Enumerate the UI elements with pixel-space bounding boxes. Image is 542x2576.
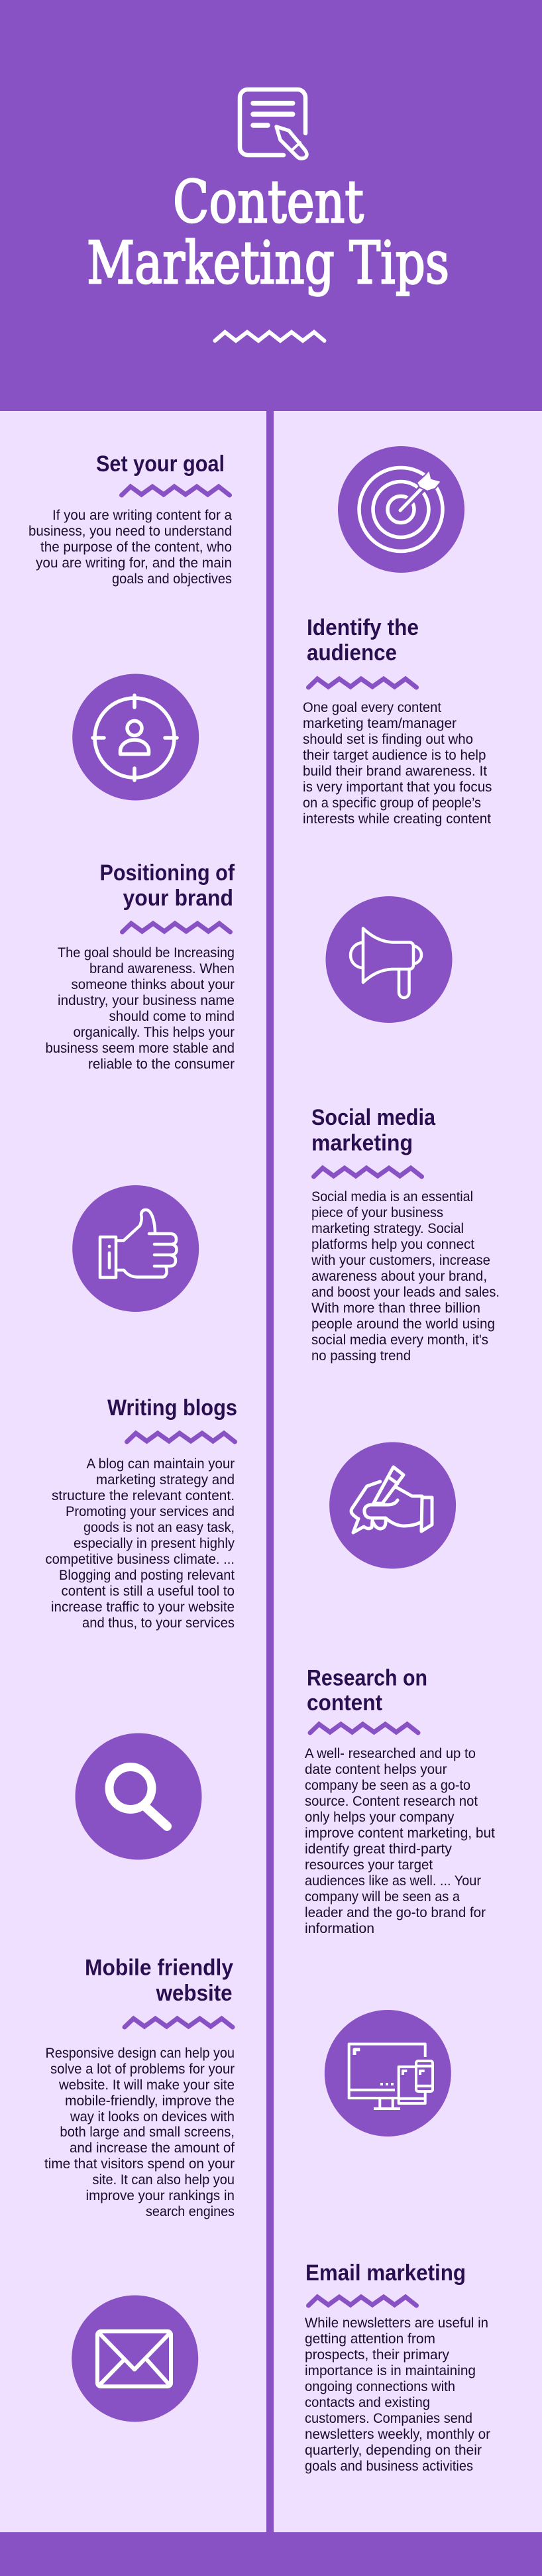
heading xyxy=(311,1105,436,1156)
heading: marketing xyxy=(311,1131,413,1156)
body text xyxy=(305,1745,495,1936)
panel: set your goal xyxy=(28,446,464,587)
zigzag xyxy=(122,923,231,932)
body text: build their brand awareness. It xyxy=(303,763,487,779)
body text: ongoing connections with xyxy=(305,2378,455,2394)
body text: the purpose of the content, who xyxy=(40,539,232,555)
heading: your brand xyxy=(123,886,233,911)
body text: goals and business activities xyxy=(305,2458,473,2474)
heading xyxy=(99,860,235,911)
heading: Identify the xyxy=(307,615,419,640)
body text: on a specific group of people’s xyxy=(303,795,481,811)
body text: quarterly, depending on their xyxy=(305,2442,482,2458)
panel: header banner xyxy=(0,0,542,411)
body text: resources your target xyxy=(305,1857,433,1873)
panel: writing blogs xyxy=(45,1395,456,1631)
body text: no passing trend xyxy=(311,1348,411,1364)
title: Marketing Tips xyxy=(87,229,449,297)
body text: with your customers, increase xyxy=(311,1252,490,1268)
body text: and boost your leads and sales. xyxy=(311,1284,500,1300)
heading: audience xyxy=(307,640,397,666)
body text xyxy=(45,945,235,1072)
body text: structure the relevant content. xyxy=(52,1488,235,1503)
zigzag xyxy=(122,487,229,495)
body text: organically. This helps your xyxy=(73,1024,235,1040)
body text: is very important that you focus xyxy=(303,779,492,795)
body text: A well- researched and up to xyxy=(305,1745,476,1761)
body text: awareness about your brand, xyxy=(311,1268,487,1284)
heading: Set your goal xyxy=(96,451,225,477)
body text: and increase the amount of xyxy=(70,2140,235,2156)
zigzag divider xyxy=(215,332,325,341)
body text: time that visitors spend on your xyxy=(44,2156,235,2172)
icon: target with arrow xyxy=(338,446,464,573)
body text: search engines xyxy=(146,2203,235,2219)
body text: Blogging and posting relevant xyxy=(59,1567,235,1583)
panel: social media marketing xyxy=(72,1105,500,1364)
heading xyxy=(307,615,419,666)
icon: audience crosshair xyxy=(72,673,199,801)
body text: increase traffic to your website xyxy=(51,1599,235,1615)
body text xyxy=(305,2315,490,2474)
body text: customers. Companies send xyxy=(305,2410,472,2426)
body text: goals and objectives xyxy=(112,571,232,587)
body text: newsletters weekly, monthly or xyxy=(305,2426,490,2442)
body text: industry, your business name xyxy=(58,992,235,1008)
icon: thumbs up xyxy=(72,1185,199,1312)
body text: The goal should be Increasing xyxy=(58,945,235,961)
body text: source. Content research not xyxy=(305,1793,478,1809)
body text xyxy=(303,699,492,827)
body text: A blog can maintain your xyxy=(86,1456,235,1472)
body text: While newsletters are useful in xyxy=(305,2315,488,2331)
body text: information xyxy=(305,1920,374,1936)
body text: people around the world using xyxy=(311,1316,495,1332)
body text: If you are writing content for a xyxy=(52,507,232,523)
body text xyxy=(45,1456,235,1631)
body text: interests while creating content xyxy=(303,811,491,827)
title xyxy=(87,168,449,297)
body text: prospects, their primary xyxy=(305,2347,449,2363)
body text: importance is in maintaining xyxy=(305,2363,476,2378)
body text: One goal every content xyxy=(303,699,441,715)
zigzag xyxy=(309,679,416,687)
body text: should set is finding out who xyxy=(303,731,473,747)
icon: envelope xyxy=(72,2295,198,2422)
panel: identify the audience xyxy=(72,615,492,827)
body text xyxy=(28,507,232,587)
body text: brand awareness. When xyxy=(89,961,235,976)
body text: Promoting your services and xyxy=(66,1503,235,1519)
body text: company be seen as a go-to xyxy=(305,1777,470,1793)
body text xyxy=(311,1189,500,1364)
heading: Research on xyxy=(307,1665,427,1690)
body text: site. It can also help you xyxy=(93,2172,235,2188)
body text: mobile-friendly, improve the xyxy=(65,2093,235,2109)
icon: megaphone xyxy=(326,896,452,1023)
body text: marketing team/manager xyxy=(303,715,457,731)
body text: getting attention from xyxy=(305,2331,435,2347)
body text: piece of your business xyxy=(311,1204,443,1220)
body text xyxy=(44,2045,235,2219)
body text: business seem more stable and xyxy=(45,1040,235,1056)
zigzag xyxy=(309,2297,416,2306)
body text: content is still a useful tool to xyxy=(61,1583,235,1599)
heading xyxy=(307,1665,427,1716)
footer bar xyxy=(0,2532,542,2576)
body text: website. It will make your site xyxy=(58,2077,235,2093)
heading: Social media xyxy=(311,1105,436,1130)
body text: especially in present highly xyxy=(74,1535,235,1551)
body text: only helps your company xyxy=(305,1809,455,1825)
heading: Writing blogs xyxy=(107,1395,237,1421)
zigzag xyxy=(314,1168,421,1177)
body text: business, you need to understand xyxy=(28,523,232,539)
body text: you are writing for, and the main xyxy=(36,555,232,571)
body text: marketing strategy. Social xyxy=(311,1220,464,1236)
heading: Email marketing xyxy=(305,2260,466,2286)
heading xyxy=(85,1956,233,2006)
body text: someone thinks about your xyxy=(72,976,235,992)
panel: email marketing xyxy=(72,2260,490,2474)
body text: should come to mind xyxy=(109,1008,235,1024)
body text: company will be seen as a xyxy=(305,1889,460,1904)
body text: competitive business climate. ... xyxy=(45,1551,235,1567)
icon: hand writing with pen xyxy=(329,1442,456,1568)
body text: Social media is an essential xyxy=(311,1189,473,1204)
icon: responsive devices xyxy=(325,2010,451,2137)
body text: improve your rankings in xyxy=(86,2188,235,2203)
body text: marketing strategy and xyxy=(96,1472,235,1488)
body text: Responsive design can help you xyxy=(45,2045,235,2061)
zigzag xyxy=(310,1724,418,1733)
panel: mobile friendly website xyxy=(44,1956,451,2219)
body text: leader and the go-to brand for xyxy=(305,1904,486,1920)
body text: improve content marketing, but xyxy=(305,1825,495,1841)
body text: solve a lot of problems for your xyxy=(50,2061,235,2077)
body text: goods is not an easy task, xyxy=(83,1519,235,1535)
body text: social media every month, it's xyxy=(311,1332,488,1348)
body text: their target audience is to help xyxy=(303,747,486,763)
icon: magnifying glass xyxy=(76,1733,201,1860)
body text: audiences like as well. ... Your xyxy=(305,1873,481,1889)
heading: Mobile friendly xyxy=(85,1956,233,1981)
body text: platforms help you connect xyxy=(311,1236,474,1252)
body text: and thus, to your services xyxy=(82,1615,235,1631)
body text: way it looks on devices with xyxy=(70,2109,235,2125)
body text: date content helps your xyxy=(305,1761,447,1777)
body text: With more than three billion xyxy=(311,1300,480,1316)
heading: Positioning of xyxy=(99,860,235,886)
body text: both large and small screens, xyxy=(60,2124,235,2140)
title: Content xyxy=(173,168,364,236)
heading: content xyxy=(307,1690,382,1716)
panel: positioning of your brand xyxy=(45,860,452,1072)
body text: reliable to the consumer xyxy=(88,1056,235,1072)
body text: contacts and existing xyxy=(305,2394,430,2410)
icon: document with pencil xyxy=(240,89,307,158)
body text: identify great third-party xyxy=(305,1841,452,1857)
zigzag xyxy=(127,1433,235,1442)
heading: website xyxy=(156,1981,233,2006)
panel: research on content xyxy=(76,1665,495,1936)
zigzag xyxy=(125,2019,233,2027)
